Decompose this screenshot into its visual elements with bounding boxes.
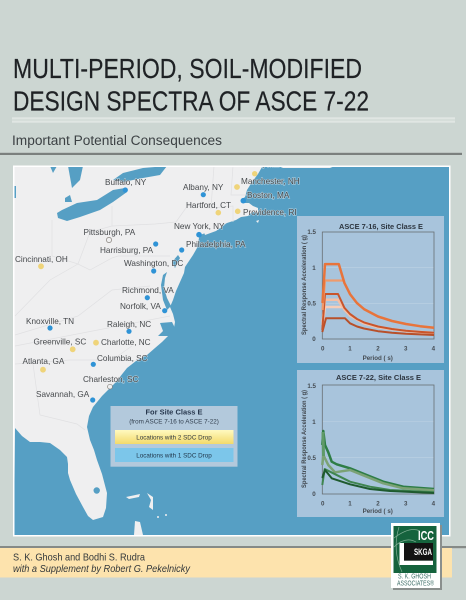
city labels: Philadelphia, PA bbox=[186, 240, 246, 249]
map panel bbox=[13, 160, 450, 536]
legend bbox=[110, 406, 238, 467]
ocean bbox=[14, 167, 449, 535]
chart: ASCE 7-16: 0 bbox=[321, 346, 325, 352]
northern land sliver bbox=[280, 167, 332, 168]
logo: SKGA: ICC bbox=[418, 528, 434, 543]
city labels: Columbia, SC bbox=[97, 354, 148, 363]
chart: ASCE 7-16: 0.5 bbox=[307, 300, 317, 308]
city labels: Cincinnati, OH bbox=[15, 255, 68, 264]
author band: S. K. Ghosh and Bodhi S. Rudra bbox=[13, 552, 145, 564]
logo: SKGA: S. K. GHOSH bbox=[398, 574, 431, 580]
legend: (from ASCE 7-16 to ASCE 7-22) bbox=[129, 419, 219, 426]
chart: ASCE 7-22: 1.5 bbox=[307, 383, 317, 390]
chart: ASCE 7-22: 1 bbox=[348, 500, 352, 508]
chart: ASCE 7-22: 0 bbox=[312, 491, 316, 498]
city labels: Greenville, SC bbox=[34, 338, 86, 346]
long island and cape islands bbox=[204, 220, 259, 235]
chart: ASCE 7-22: 0.5 bbox=[307, 455, 317, 462]
chart: ASCE 7-22 bbox=[297, 370, 444, 517]
title: DESIGN SPECTRA OF ASCE 7-22 bbox=[13, 86, 369, 116]
city labels: Richmond, VA bbox=[122, 286, 174, 295]
chart: ASCE 7-16: 3 bbox=[404, 346, 408, 352]
legend: For Site Class E bbox=[145, 408, 203, 416]
city labels: Washington, DC bbox=[124, 259, 183, 268]
chart: ASCE 7-22: 1 bbox=[312, 419, 316, 426]
chart: ASCE 7-16: 4 bbox=[432, 346, 436, 352]
bahamas bbox=[126, 493, 167, 535]
city labels: Providence, RI bbox=[243, 208, 297, 217]
city labels bbox=[15, 160, 300, 399]
author band bbox=[0, 546, 466, 578]
chart: ASCE 7-16: 1.5 bbox=[307, 229, 317, 236]
title bbox=[13, 53, 369, 116]
chart: ASCE 7-22: ASCE 7-22, Site Class E bbox=[336, 373, 421, 382]
city labels: Buffalo, NY bbox=[105, 178, 147, 187]
title: MULTI-PERIOD, SOIL-MODIFIED bbox=[13, 53, 362, 84]
legend: Locations with 1 SDC Drop bbox=[136, 452, 212, 460]
city labels: Manchester, NH bbox=[241, 177, 300, 186]
chart: ASCE 7-16: 0 bbox=[312, 336, 316, 343]
city labels: Savannah, GA bbox=[36, 390, 90, 399]
city labels: Pittsburgh, PA bbox=[84, 228, 136, 237]
chart: ASCE 7-22: Spectral Response Acceleration ( g) bbox=[302, 390, 308, 488]
chart: ASCE 7-22: 2 bbox=[376, 500, 380, 508]
chart: ASCE 7-16 bbox=[297, 216, 444, 363]
chart: ASCE 7-22: 4 bbox=[432, 500, 436, 508]
city markers bbox=[47, 187, 246, 403]
logo: SKGA bbox=[391, 523, 442, 590]
author band: with a Supplement by Robert G. Pekelnicky bbox=[13, 564, 191, 575]
city labels: Knoxville, TN bbox=[26, 317, 74, 326]
chart: ASCE 7-16: Spectral Response Acceleration ( g) bbox=[302, 235, 308, 335]
city labels: Atlanta, GA bbox=[22, 357, 65, 366]
city labels: Raleigh, NC bbox=[107, 320, 151, 329]
great lakes bbox=[14, 166, 167, 221]
city labels: Albany, NY bbox=[183, 183, 224, 192]
subtitle: Important Potential Consequences bbox=[12, 133, 222, 148]
city labels: Norfolk, VA bbox=[120, 302, 161, 311]
chart: ASCE 7-22: Period ( s) bbox=[363, 508, 393, 515]
chart: ASCE 7-16: 2 bbox=[376, 346, 380, 352]
land bbox=[14, 167, 262, 520]
city labels: Hartford, CT bbox=[186, 201, 231, 210]
legend: Locations with 2 SDC Drop bbox=[136, 434, 212, 442]
logo: SKGA: SKGA bbox=[414, 547, 432, 557]
city labels: Harrisburg, PA bbox=[100, 246, 154, 255]
city labels: Charleston, SC bbox=[83, 375, 139, 384]
chart: ASCE 7-16: ASCE 7-16, Site Class E bbox=[339, 222, 423, 231]
chart: ASCE 7-16: 1 bbox=[312, 265, 316, 272]
city labels: Charlotte, NC bbox=[101, 338, 151, 347]
chesapeake bay and sounds bbox=[94, 255, 180, 494]
city labels: Boston, MA bbox=[247, 191, 290, 200]
city labels: Portland, ME bbox=[232, 160, 280, 169]
chart: ASCE 7-22: 0 bbox=[321, 500, 325, 508]
city labels: New York, NY bbox=[174, 222, 225, 231]
logo: SKGA: ASSOCIATES® bbox=[397, 580, 435, 588]
chart: ASCE 7-16: 1 bbox=[348, 346, 352, 352]
chart: ASCE 7-16: Period ( s) bbox=[363, 355, 393, 362]
chart: ASCE 7-22: 3 bbox=[404, 500, 408, 508]
